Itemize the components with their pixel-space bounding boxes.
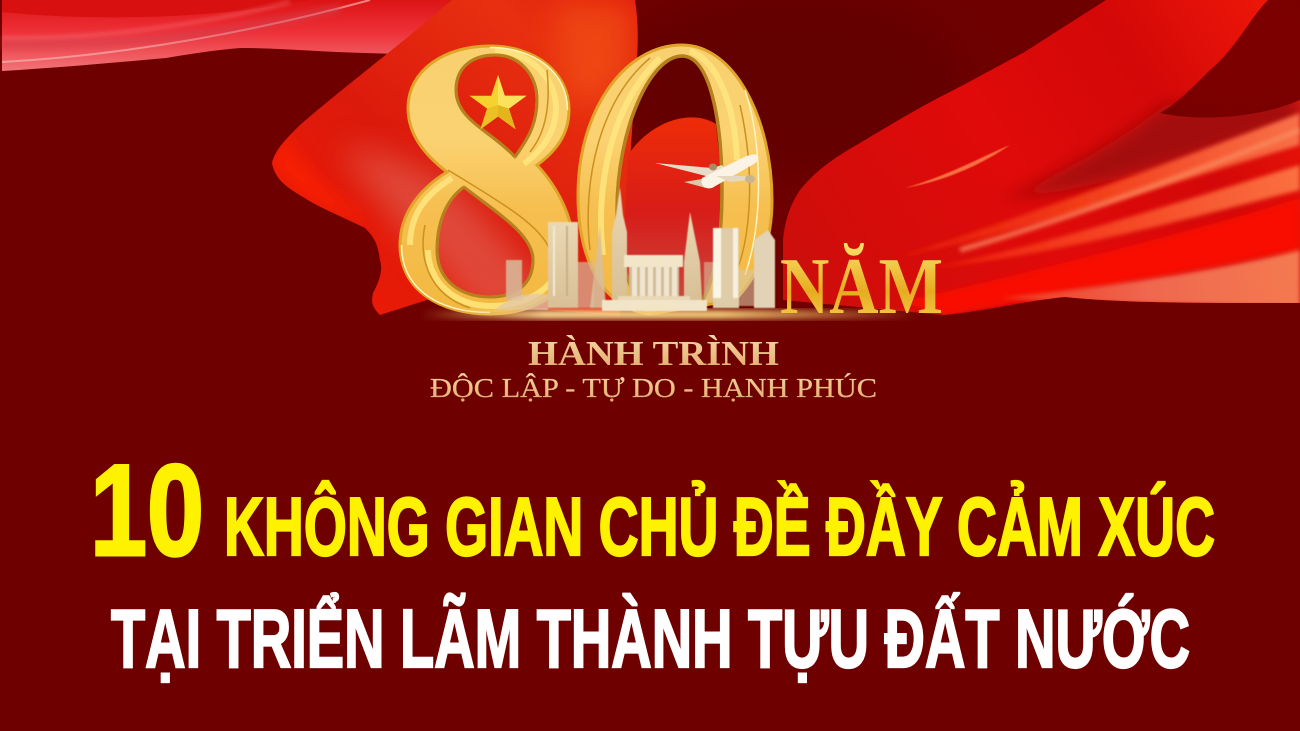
central red flag bbox=[272, 0, 640, 320]
digit 0 bbox=[578, 45, 772, 314]
mausoleum bbox=[602, 255, 707, 311]
red sun behind zero bbox=[620, 117, 735, 305]
subtitle: độc lập tự do hạnh phúc: ĐỘC LẬP - TỰ DO - HẠNH PHÚC bbox=[430, 373, 877, 403]
title line 1 bbox=[90, 437, 1215, 583]
number 80 bbox=[400, 45, 772, 314]
subtitle: hành trình: HÀNH TRÌNH bbox=[528, 334, 779, 373]
base glow bbox=[420, 310, 920, 319]
top-left ribbon bbox=[2, 0, 470, 71]
digit 8 bbox=[400, 46, 574, 314]
icon: star bbox=[470, 75, 526, 129]
title line 1: 10 bbox=[90, 437, 204, 583]
city skyline bbox=[495, 187, 775, 311]
right red ribbon bbox=[783, 0, 1300, 315]
icon: airplane bbox=[655, 154, 758, 188]
label: năm: NĂM bbox=[780, 243, 943, 331]
